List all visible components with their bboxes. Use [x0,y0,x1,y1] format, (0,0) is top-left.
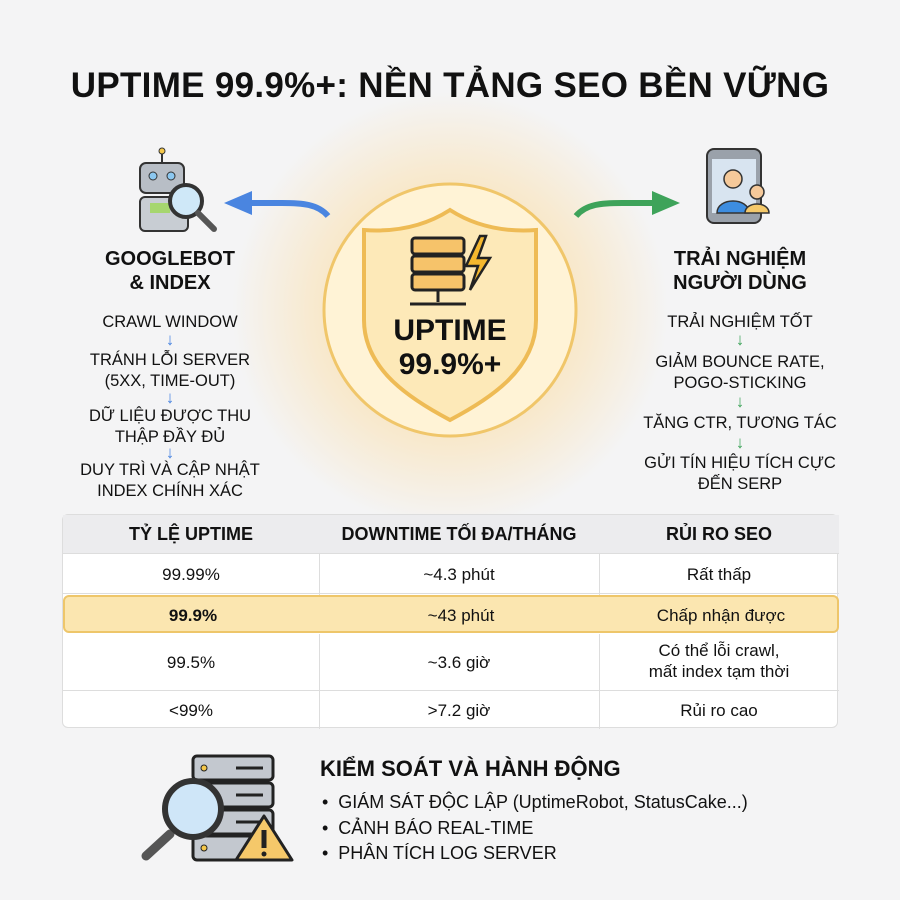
list: googlebot flow: ↓ [166,443,174,462]
row 99.99: Rất thấp [687,565,751,584]
heading: user experience: NGƯỜI DÙNG [673,272,807,294]
icon: phone with users [706,148,770,224]
table header [63,515,839,554]
list: UX flow: ↓ [736,392,744,411]
center circle with shield: UPTIME [393,314,507,347]
row 99.5: Có thể lỗi crawl, [659,641,779,660]
bullet list: actions: • CẢNH BÁO REAL-TIME [322,818,533,838]
table header: TỶ LỆ UPTIME [129,524,253,544]
background glow [230,90,670,530]
bullet list: actions [322,792,748,863]
title: UPTIME 99.9%+: NỀN TẢNG SEO BỀN VỮNG [71,66,829,105]
row <99: >7.2 giờ [428,701,490,720]
row 99.9 highlighted: 99.9% [169,606,217,625]
list: UX flow: ↓ [736,330,744,349]
list: UX flow: TRẢI NGHIỆM TỐT [667,313,813,331]
row 99.5 [63,634,839,691]
row <99: Rủi ro cao [680,701,758,720]
icon: server with magnifier and warning [142,754,294,862]
list: UX flow: TĂNG CTR, TƯƠNG TÁC [643,414,837,432]
center circle with shield: 99.9%+ [399,348,501,381]
list: googlebot flow: (5XX, TIME-OUT) [105,372,235,390]
row 99.5: 99.5% [167,653,215,672]
table header: DOWNTIME TỐI ĐA/THÁNG [342,524,576,544]
heading: user experience [673,246,807,294]
list: googlebot flow: ↓ [166,330,174,349]
row 99.99 [63,554,839,594]
row 99.9 highlighted: ~43 phút [428,606,494,625]
row 99.9 highlighted [63,595,839,633]
list: googlebot flow: INDEX CHÍNH XÁC [97,482,243,500]
row <99 [169,701,758,720]
list: googlebot flow: CRAWL WINDOW [102,313,238,331]
heading: googlebot: GOOGLEBOT [105,248,235,270]
heading: googlebot: & INDEX [129,272,211,294]
row 99.99: ~4.3 phút [423,565,495,584]
list: googlebot flow [80,313,260,500]
center circle with shield [322,182,578,438]
row 99.5: mất index tạm thời [649,662,789,681]
list: UX flow: GỬI TÍN HIỆU TÍCH CỰC [644,454,836,472]
table header: RỦI RO SEO [666,524,772,544]
table: uptime vs downtime [62,514,838,728]
arrow: right green [574,191,680,218]
row 99.5: ~3.6 giờ [428,653,490,672]
list: googlebot flow: ↓ [166,388,174,407]
list: googlebot flow: DUY TRÌ VÀ CẬP NHẬT [80,461,260,479]
list: googlebot flow: DỮ LIỆU ĐƯỢC THU [89,407,251,425]
heading: googlebot [105,248,235,294]
heading: control and action: KIỂM SOÁT VÀ HÀNH ĐỘNG [320,756,621,781]
list: UX flow: ĐẾN SERP [698,475,782,493]
row 99.99: 99.99% [162,565,220,584]
list: googlebot flow: TRÁNH LỖI SERVER [90,351,250,369]
row 99.9 highlighted: Chấp nhận được [657,606,785,625]
row <99: <99% [169,701,213,720]
bullet list: actions: • GIÁM SÁT ĐỘC LẬP (UptimeRobot, StatusCake...) [322,792,748,812]
icon: robot with magnifier [139,148,217,232]
list: UX flow: POGO-STICKING [674,374,806,392]
list: UX flow [643,312,837,493]
list: UX flow: ↓ [736,433,744,452]
list: googlebot flow: THẬP ĐẦY ĐỦ [115,428,225,446]
list: UX flow: GIẢM BOUNCE RATE, [655,353,825,371]
heading: user experience: TRẢI NGHIỆM [674,248,806,270]
bullet list: actions: • PHÂN TÍCH LOG SERVER [322,843,557,863]
arrow: left blue [224,191,330,218]
